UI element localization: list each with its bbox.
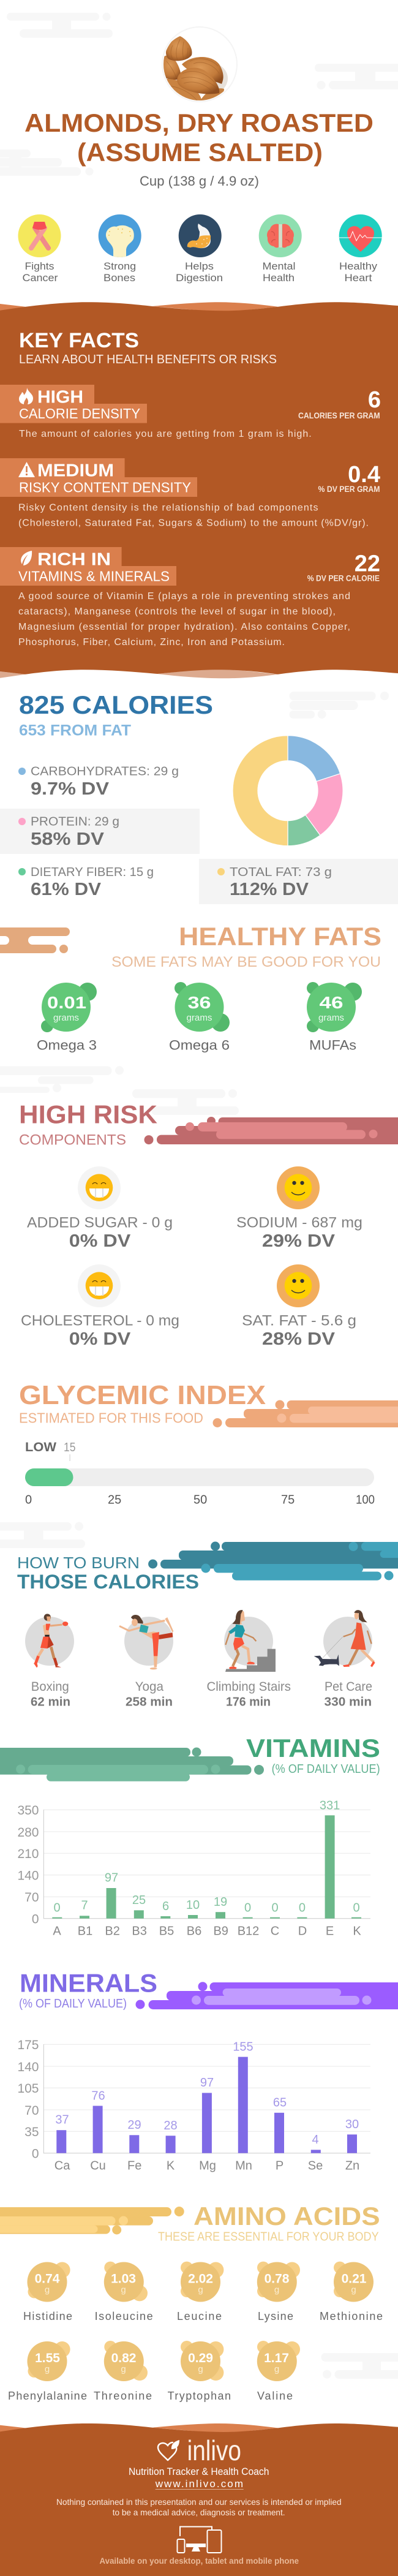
fact: medium risky content: RISKY CONTENT DENSITY: [19, 479, 191, 495]
heading: [19, 1969, 157, 2011]
icon: strong bones: Strong: [103, 260, 136, 272]
bar chart: vitamins: 10: [186, 1898, 200, 1912]
title: ALMONDS, DRY ROASTED: [24, 108, 374, 137]
gauge: 100: [356, 1494, 375, 1507]
activity: climbing stairs: [206, 1610, 291, 1709]
icon: mental health: [259, 214, 302, 284]
amino grid: 0.21: [342, 2272, 367, 2286]
item: sodium: 29% DV: [262, 1231, 336, 1251]
activity: boxing: Boxing: [31, 1680, 69, 1694]
heading: (% OF DAILY VALUE): [272, 1762, 380, 1776]
row: dietary fiber: DIETARY FIBER: 15 g: [31, 865, 154, 879]
fact: rich in vitamins and minerals: VITAMINS & MINERALS: [18, 568, 170, 584]
bar chart: vitamins: B6: [187, 1924, 201, 1938]
mufas: MUFAs: [309, 1038, 356, 1053]
banner: [145, 1117, 398, 1144]
bar chart: vitamins: 7: [81, 1899, 88, 1913]
amino grid: 0.29: [188, 2351, 213, 2365]
fact: high calorie density: HIGH: [37, 388, 83, 407]
amino grid: Methionine: [320, 2310, 383, 2322]
heading: MINERALS: [20, 1969, 157, 1998]
bar chart: vitamins: 0: [53, 1902, 61, 1915]
item: cholesterol: CHOLESTEROL - 0 mg: [21, 1313, 179, 1329]
amino grid: [8, 2262, 383, 2402]
almond photo: [160, 27, 237, 105]
banner: [148, 1541, 398, 1581]
heading: [17, 1554, 199, 1593]
benefit icons: [18, 214, 382, 284]
row: total fat: TOTAL FAT: 73 g: [230, 865, 332, 879]
fact: rich in vitamins and minerals: Magnesium (essential for proper hydration). Also contains Copper,: [18, 622, 350, 632]
logo: [158, 2434, 241, 2466]
icon: healthy heart: Heart: [344, 272, 372, 284]
icon: mental health: Health: [263, 272, 295, 284]
fact: rich in vitamins and minerals: cataracts), Manganese (controls the level of sugar in the blood),: [18, 606, 336, 617]
icon: devices: [178, 2526, 222, 2553]
heading: GLYCEMIC INDEX: [19, 1380, 266, 1410]
amino grid: g: [274, 2285, 279, 2295]
bar chart: vitamins: [17, 1799, 370, 1938]
gauge: 75: [281, 1494, 295, 1507]
fact: medium risky content: (Cholesterol, Saturated Fat, Sugars & Sodium) to the amount (%DV/gr).: [18, 518, 369, 529]
icon: helps digestion: Helps: [185, 260, 214, 272]
tagline: [129, 2466, 269, 2490]
panel: vitamins: [0, 1734, 380, 1938]
heading: SOME FATS MAY BE GOOD FOR YOU: [111, 954, 381, 970]
bar chart: vitamins: 350: [17, 1804, 39, 1818]
disclaimer: to be a medical advice, diagnosis or treatment.: [113, 2507, 285, 2517]
fact: medium risky content: 0.4: [348, 462, 380, 488]
amino grid: 1.03: [111, 2272, 136, 2286]
heading: [19, 1100, 157, 1149]
icon: healthy heart: Healthy: [339, 260, 378, 272]
fact: rich in vitamins and minerals: A good source of Vitamin E (plays a role in preventing strokes and: [18, 591, 350, 602]
tagline: Nutrition Tracker & Health Coach: [129, 2466, 269, 2477]
row: total fat: 112% DV: [230, 880, 309, 899]
panel: how to burn calories: [17, 1541, 398, 1709]
activity: climbing stairs: Climbing Stairs: [206, 1680, 291, 1694]
amino grid: g: [45, 2364, 50, 2374]
heading: THOSE CALORIES: [17, 1571, 199, 1593]
heading: [19, 690, 213, 739]
bar chart: minerals: 76: [91, 2089, 105, 2102]
heading: (% OF DAILY VALUE): [19, 1997, 127, 2011]
bar chart: minerals: 140: [17, 2060, 39, 2074]
bar chart: vitamins: 19: [214, 1895, 227, 1909]
bar chart: vitamins: E: [326, 1924, 334, 1938]
bar chart: minerals: 35: [24, 2125, 39, 2139]
heading: LEARN ABOUT HEALTH BENEFITS OR RISKS: [19, 353, 277, 366]
amino grid: Tryptophan: [168, 2390, 231, 2402]
heading: 653 FROM FAT: [19, 722, 131, 739]
bar chart: vitamins: 0: [244, 1902, 251, 1915]
panel: calories: [0, 690, 398, 904]
amino grid: 2.02: [188, 2272, 213, 2286]
bar chart: vitamins: 140: [17, 1868, 39, 1883]
bar chart: minerals: Mg: [199, 2159, 216, 2173]
heading: THESE ARE ESSENTIAL FOR YOUR BODY: [158, 2230, 379, 2244]
row: protein: [0, 809, 200, 854]
bar chart: vitamins: 0: [299, 1902, 306, 1915]
heading: [111, 922, 381, 970]
amino grid: 0.78: [265, 2272, 290, 2286]
caption: Available on your desktop, tablet and mobile phone: [99, 2556, 299, 2566]
amino grid: g: [198, 2285, 203, 2295]
amino grid: g: [351, 2285, 356, 2295]
row: carbohydrates: 9.7% DV: [31, 779, 110, 799]
bar chart: minerals: Se: [308, 2159, 323, 2173]
gauge: 0: [25, 1494, 32, 1507]
omega 6: Omega 6: [169, 1038, 230, 1053]
fact: rich in vitamins and minerals: % DV PER CALORIE: [307, 573, 380, 583]
heading: AMINO ACIDS: [193, 2202, 380, 2230]
omega 6: 36: [187, 993, 211, 1012]
heading: [158, 2202, 380, 2244]
amino grid: g: [198, 2364, 203, 2374]
bar chart: minerals: K: [167, 2159, 175, 2173]
icon: strong bones: [99, 214, 141, 284]
omega 3: 0.01: [47, 993, 86, 1012]
item: saturated fat: [242, 1264, 356, 1349]
bar chart: vitamins: 0: [32, 1913, 39, 1926]
amino grid: g: [274, 2364, 279, 2374]
logo: inlivo: [187, 2434, 241, 2466]
disclaimer: [56, 2497, 342, 2517]
activity: yoga: [119, 1615, 173, 1709]
bar chart: vitamins: K: [353, 1924, 361, 1938]
fact: rich in vitamins and minerals: RICH IN: [37, 550, 111, 570]
serving size: Cup (138 g / 4.9 oz): [140, 173, 259, 189]
bar chart: minerals: 29: [127, 2118, 141, 2132]
item: sodium: SODIUM - 687 mg: [236, 1215, 362, 1231]
fact: rich in vitamins and minerals: [0, 547, 380, 648]
panel: minerals: [17, 1969, 398, 2173]
omega 3: grams: [53, 1013, 79, 1023]
bar chart: minerals: 0: [32, 2147, 39, 2161]
mufas: grams: [318, 1013, 344, 1023]
row: protein: 58% DV: [31, 829, 105, 849]
bar chart: minerals: 4: [312, 2133, 319, 2147]
item: sodium: [236, 1166, 362, 1251]
heading: HOW TO BURN: [17, 1554, 140, 1572]
bar chart: minerals: 97: [200, 2076, 214, 2090]
bar chart: vitamins: B2: [105, 1924, 120, 1938]
amino grid: 1.17: [264, 2351, 289, 2365]
tagline: www.inlivo.com: [155, 2478, 243, 2490]
amino grid: 1.55: [35, 2351, 60, 2365]
heading: KEY FACTS: [19, 329, 139, 352]
footer: [0, 2423, 398, 2576]
bar chart: vitamins: B1: [78, 1924, 92, 1938]
item: saturated fat: 28% DV: [262, 1329, 336, 1349]
bar chart: vitamins: 331: [320, 1799, 340, 1812]
panel: key facts: [0, 302, 398, 678]
gauge: LOW: [25, 1440, 56, 1454]
panel: amino acids: [0, 2202, 383, 2402]
bar chart: vitamins: 97: [105, 1872, 118, 1885]
bar chart: minerals: 105: [17, 2082, 39, 2096]
icon: flame: [19, 388, 33, 404]
item: cholesterol: 0% DV: [69, 1329, 131, 1349]
fact: high calorie density: [0, 385, 381, 439]
heading: COMPONENTS: [19, 1132, 126, 1149]
activity: yoga: 258 min: [126, 1695, 173, 1709]
activity: pet care: [314, 1610, 375, 1709]
fact: high calorie density: The amount of calories you are getting from 1 gram is high.: [19, 429, 312, 439]
omega 3: [37, 983, 97, 1053]
bar chart: minerals: 37: [55, 2113, 69, 2127]
panel: healthy fats: [0, 922, 381, 1053]
amino grid: g: [121, 2285, 126, 2295]
icon: leaf: [21, 551, 32, 565]
activity: climbing stairs: 176 min: [226, 1695, 271, 1709]
amino grid: Phenylalanine: [8, 2390, 87, 2402]
omega 3: Omega 3: [37, 1038, 97, 1053]
bar chart: vitamins: B9: [213, 1924, 228, 1938]
icon: strong bones: Bones: [103, 272, 135, 284]
activity: yoga: Yoga: [135, 1680, 163, 1694]
heading: [19, 1380, 266, 1426]
heading: HIGH RISK: [19, 1100, 157, 1128]
banner: [0, 927, 70, 953]
banner: [0, 2207, 184, 2235]
mufas: 46: [320, 993, 343, 1012]
banner: [0, 1747, 264, 1781]
omega 6: [169, 982, 230, 1053]
icon: warning triangle: [18, 462, 35, 477]
banner: [136, 1982, 398, 2009]
bar chart: minerals: Ca: [54, 2159, 70, 2173]
bar chart: minerals: 155: [233, 2040, 253, 2053]
icon: helps digestion: [176, 214, 223, 284]
bar chart: vitamins: C: [271, 1924, 279, 1938]
disclaimer: Nothing contained in this presentation and our services is intended or implied: [56, 2497, 342, 2507]
heading: VITAMINS: [246, 1734, 380, 1762]
bar chart: minerals: Zn: [345, 2159, 359, 2173]
amino grid: 0.82: [111, 2351, 136, 2365]
amino grid: Leucine: [177, 2310, 222, 2322]
bar chart: vitamins: 6: [162, 1900, 169, 1913]
fact: high calorie density: CALORIES PER GRAM: [298, 411, 380, 420]
icon: healthy heart: [339, 214, 382, 284]
bar chart: vitamins: B12: [238, 1924, 259, 1938]
bar chart: vitamins: 0: [353, 1902, 360, 1915]
fact: high calorie density: CALORIE DENSITY: [19, 406, 140, 421]
bar chart: minerals: 28: [163, 2119, 178, 2132]
gauge: 50: [193, 1494, 207, 1507]
gauge: 25: [108, 1494, 121, 1507]
item: added sugar: ADDED SUGAR - 0 g: [27, 1215, 173, 1231]
header: [24, 27, 374, 189]
bar chart: vitamins: A: [53, 1924, 61, 1938]
amino grid: Isoleucine: [95, 2310, 153, 2322]
fact: medium risky content: % DV PER GRAM: [318, 485, 380, 494]
amino grid: 0.74: [35, 2272, 60, 2286]
heading: [19, 329, 277, 366]
icon: fights cancer: Cancer: [22, 272, 58, 284]
omega 6: grams: [186, 1013, 212, 1023]
fact: medium risky content: MEDIUM: [37, 461, 114, 480]
bar chart: minerals: Cu: [90, 2159, 106, 2173]
amino grid: Histidine: [23, 2310, 72, 2322]
bar chart: minerals: [17, 2038, 370, 2173]
activity: pet care: 330 min: [325, 1695, 372, 1709]
bar chart: vitamins: 70: [24, 1890, 39, 1905]
row: dietary fiber: 61% DV: [31, 880, 102, 899]
bar chart: vitamins: 0: [271, 1902, 279, 1915]
icon: fights cancer: Fights: [24, 260, 54, 272]
bar chart: minerals: P: [276, 2159, 283, 2173]
bar chart: vitamins: B3: [132, 1924, 147, 1938]
bar chart: vitamins: B5: [159, 1924, 174, 1938]
bar chart: vitamins: 210: [17, 1847, 39, 1861]
fact: rich in vitamins and minerals: Phosphorus, Fiber, Calcium, Zinc, Iron and Potassium.: [18, 637, 285, 648]
item: cholesterol: [21, 1264, 179, 1349]
activity: pet care: Pet Care: [325, 1680, 372, 1694]
row: carbohydrates: [18, 765, 179, 799]
fact: rich in vitamins and minerals: 22: [355, 551, 380, 577]
heading: ESTIMATED FOR THIS FOOD: [19, 1410, 203, 1426]
row: carbohydrates: CARBOHYDRATES: 29 g: [31, 765, 179, 779]
heading: HEALTHY FATS: [179, 922, 381, 951]
row: protein: PROTEIN: 29 g: [31, 815, 119, 829]
heading: 825 CALORIES: [19, 690, 213, 719]
row: dietary fiber: [18, 865, 154, 899]
bar chart: minerals: 70: [24, 2104, 39, 2118]
activity: boxing: [25, 1614, 74, 1709]
fact: medium risky content: Risky Content density is the relationship of bad components: [18, 503, 318, 513]
bar chart: minerals: 65: [273, 2096, 287, 2110]
gauge: [25, 1440, 375, 1507]
activity: boxing: 62 min: [31, 1695, 70, 1709]
title: [24, 108, 374, 167]
fact: medium risky content: [0, 458, 380, 529]
fact: high calorie density: 6: [368, 387, 381, 413]
title: (ASSUME SALTED): [77, 138, 323, 167]
bar chart: vitamins: 25: [132, 1894, 146, 1907]
item: added sugar: [27, 1166, 173, 1251]
icon: helps digestion: Digestion: [176, 272, 223, 284]
icon: mental health: Mental: [262, 260, 295, 272]
bar chart: minerals: 30: [345, 2118, 359, 2131]
bar chart: vitamins: D: [298, 1924, 307, 1938]
donut chart: [233, 736, 343, 846]
panel: high risk components: [19, 1100, 398, 1349]
banner: [213, 1400, 398, 1427]
bar chart: minerals: 175: [17, 2038, 39, 2052]
bar chart: vitamins: 280: [17, 1826, 39, 1840]
bar chart: minerals: Mn: [235, 2159, 252, 2173]
heading: [246, 1734, 380, 1776]
icon: fights cancer: [18, 214, 61, 284]
amino grid: g: [45, 2285, 50, 2295]
amino grid: Valine: [257, 2390, 293, 2402]
amino grid: Lysine: [258, 2310, 293, 2322]
row: total fat: [199, 859, 398, 904]
mufas: [307, 982, 362, 1053]
gauge: 15: [64, 1441, 76, 1454]
item: added sugar: 0% DV: [69, 1231, 131, 1251]
amino grid: Threonine: [94, 2390, 152, 2402]
panel: glycemic index: [19, 1380, 398, 1507]
amino grid: g: [121, 2364, 126, 2374]
bar chart: minerals: Fe: [127, 2159, 141, 2173]
item: saturated fat: SAT. FAT - 5.6 g: [242, 1313, 356, 1329]
